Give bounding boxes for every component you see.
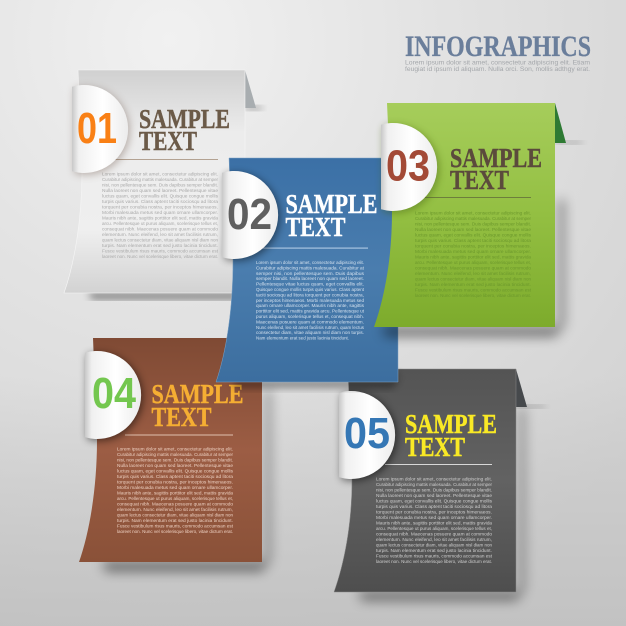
title block bbox=[405, 30, 591, 73]
body text: elementum. Nunc eleifend, leo sit amet facilisis rutrum, bbox=[102, 232, 218, 238]
panel: 01 bbox=[64, 70, 262, 299]
body text bbox=[376, 476, 493, 565]
body text: Lorem ipsum dolor sit amet, consectetur adipiscing elit. bbox=[415, 210, 531, 216]
heading: TEXT bbox=[450, 164, 509, 195]
body text: turpis. Nam elementum erat sed justo lacinia tincidunt. bbox=[415, 282, 531, 288]
fold bbox=[245, 70, 256, 108]
body text: quam lectus consectetur diam, vitae aliquam nisl diam non bbox=[415, 276, 531, 282]
number badge bbox=[72, 85, 130, 175]
body text: luctus quam, eget convallis elit. Quisque congue mollis bbox=[102, 194, 219, 200]
body text: consequat nibh. Maecenas posuere quam at commodo bbox=[415, 266, 531, 272]
body text: consequat nibh. Maecenas posuere quam at commodo bbox=[102, 226, 218, 232]
body text: consequat nibh. Maecenas posuere quam at commodo bbox=[117, 502, 233, 508]
paper bbox=[216, 158, 398, 382]
body text: Pellentesque vitae luctus quam, eget convallis elit. bbox=[256, 282, 364, 288]
body text: Nulla laoreet non quam sed laoreet. Pellentesque vitae bbox=[102, 188, 218, 194]
body text: laoreet non. Nunc vel scelerisque libero, vitae dictum erat. bbox=[376, 559, 492, 565]
body text: turpis. Nam elementum erat sed justo lacinia tincidunt. bbox=[376, 548, 492, 554]
body text: luctus quam, eget convallis elit. Quisque congue mollis bbox=[117, 468, 234, 474]
body text: luctus quam, eget convallis elit. Quisque congue mollis bbox=[376, 498, 493, 504]
body text: Mauris nibh ante, sagittis porttitor elit sed, mattis gravida bbox=[102, 216, 218, 222]
body text: elementum. Nunc eleifend, leo sit amet facilisis rutrum, bbox=[117, 507, 233, 513]
body text: quam lectus consectetur diam, vitae aliquam nisl diam non bbox=[376, 542, 492, 548]
body text: nisi, non pellentesque sem. Duis dapibus semper blandit. bbox=[376, 488, 492, 494]
body text: luctus quam, eget convallis elit. Quisque congue mollis bbox=[415, 232, 532, 238]
body text: semper nisi, non pellentesque sem. Duis dapibus bbox=[256, 271, 365, 277]
body text: semper blandit. Nulla laoreet non quam sed laoreet. bbox=[256, 276, 364, 282]
heading bbox=[286, 188, 378, 242]
number badge: 04 bbox=[92, 369, 136, 418]
number badge bbox=[381, 123, 439, 213]
body text: Fusce vestibulum risus mauris, commodo accumsan est bbox=[376, 554, 493, 560]
body text: arcu. Pellentesque ut purus aliquam, scelerisque tellus et, bbox=[117, 496, 233, 502]
body text: Nunc eleifend, leo sit amet facilisis rutrum, quam lectus bbox=[256, 325, 365, 331]
body text: Curabitur adipiscing mattis malesuada. Curabitur at bbox=[256, 265, 365, 271]
body text: torquent per conubia nostra, per inceptos himenaeos. bbox=[415, 244, 531, 250]
body text: nisi, non pellentesque sem. Duis dapibus semper blandit. bbox=[415, 222, 531, 228]
heading bbox=[405, 408, 497, 462]
panel: 05 bbox=[334, 369, 545, 600]
paper bbox=[79, 338, 262, 562]
body text bbox=[117, 446, 234, 535]
body text: consequat nibh. Maecenas posuere quam at commodo bbox=[376, 532, 492, 538]
body text: quam ornare ullamcorper. Mauris nibh ante, sagittis bbox=[256, 303, 365, 309]
body text: Fusce vestibulum risus mauris, commodo accumsan est bbox=[102, 248, 219, 254]
heading: SAMPLE bbox=[405, 408, 497, 439]
body text: Curabitur adipiscing mattis malesuada. Curabitur at semper bbox=[102, 177, 218, 183]
body text: Nulla laoreet non quam sed laoreet. Pellentesque vitae bbox=[117, 463, 233, 469]
body text: Fusce vestibulum risus mauris, commodo accumsan est bbox=[415, 288, 532, 294]
body text: porttitor elit sed, mattis gravida arcu. Pellentesque ut bbox=[256, 309, 365, 315]
body text: Mauris nibh ante, sagittis porttitor elit sed, mattis gravida bbox=[117, 490, 233, 496]
body text: Curabitur adipiscing mattis malesuada. Curabitur at semper bbox=[415, 216, 531, 222]
body text: laoreet non. Nunc vel scelerisque libero, vitae dictum erat. bbox=[117, 529, 233, 535]
body text: turpis quis varius. Class aptent taciti sociosqu ad litora bbox=[117, 474, 233, 480]
body text: turpis. Nam elementum erat sed justo lacinia tincidunt. bbox=[117, 518, 233, 524]
body text: taciti sociosqu ad litora torquent per conubia nostra, bbox=[256, 292, 364, 298]
body text: Nam elementum erat sed justo lacinia tincidunt. bbox=[256, 336, 349, 342]
body text: turpis. Nam elementum erat sed justo lacinia tincidunt. bbox=[102, 243, 218, 249]
heading bbox=[152, 378, 244, 432]
body text: Curabitur adipiscing mattis malesuada. Curabitur at semper bbox=[117, 452, 233, 458]
body text bbox=[415, 210, 532, 299]
body text: arcu. Pellentesque ut purus aliquam, scelerisque tellus et, bbox=[376, 526, 492, 532]
body text: quam lectus consectetur diam, vitae aliquam nisl diam non bbox=[102, 238, 218, 244]
body text bbox=[102, 172, 219, 260]
body text: turpis quis varius. Class aptent taciti sociosqu ad litora bbox=[415, 238, 531, 244]
body text: Fusce vestibulum risus mauris, commodo accumsan est bbox=[117, 524, 234, 530]
number badge bbox=[222, 171, 280, 261]
body text: Lorem ipsum dolor sit amet, consectetur adipiscing elit. bbox=[102, 172, 218, 178]
body text: arcu. Pellentesque ut purus aliquam, scelerisque tellus et, bbox=[415, 260, 531, 266]
heading: SAMPLE bbox=[152, 378, 244, 409]
body text: Curabitur adipiscing mattis malesuada. Curabitur at semper bbox=[376, 482, 492, 488]
body text: Nulla laoreet non quam sed laoreet. Pellentesque vitae bbox=[415, 227, 531, 233]
body text: Nulla laoreet non quam sed laoreet. Pellentesque vitae bbox=[376, 493, 492, 499]
body text: Morbi malesuada metus sed quam ornare ullamcorper. bbox=[376, 515, 492, 521]
heading: SAMPLE bbox=[139, 103, 230, 134]
heading: TEXT bbox=[152, 401, 212, 432]
number badge: 03 bbox=[386, 142, 430, 190]
body text: consectetur diam, vitae aliquam nisl diam non turpis. bbox=[256, 330, 364, 336]
number badge bbox=[85, 351, 143, 441]
body text: nisi, non pellentesque sem. Duis dapibus semper blandit. bbox=[102, 182, 218, 188]
body text: purus aliquam, scelerisque tellus et, consequat nibh. bbox=[256, 314, 364, 320]
panel: 04 bbox=[79, 338, 270, 571]
heading: SAMPLE bbox=[286, 188, 378, 219]
body text: laoreet non. Nunc vel scelerisque libero, vitae dictum erat. bbox=[102, 254, 218, 260]
panel: 03 bbox=[374, 103, 582, 336]
paper bbox=[374, 103, 555, 327]
body text: Morbi malesuada metus sed quam ornare ullamcorper. bbox=[415, 249, 531, 255]
number badge: 05 bbox=[344, 409, 390, 458]
body text: laoreet non. Nunc vel scelerisque libero, vitae dictum erat. bbox=[415, 293, 531, 299]
paper bbox=[64, 70, 245, 293]
number badge: 02 bbox=[227, 190, 272, 239]
heading bbox=[450, 142, 542, 195]
body text: arcu. Pellentesque ut purus aliquam, scelerisque tellus et, bbox=[102, 221, 218, 227]
body text: Lorem ipsum dolor sit amet, consectetur adipiscing elit. bbox=[117, 446, 233, 452]
body text: Mauris nibh ante, sagittis porttitor elit sed, mattis gravida bbox=[376, 520, 492, 526]
panel: 02 bbox=[216, 158, 398, 388]
subtitle bbox=[405, 60, 590, 73]
number badge: 01 bbox=[77, 104, 117, 153]
heading: TEXT bbox=[139, 125, 197, 156]
subtitle: feugiat id ipsum id aliquam. Nulla orci. Son, mollis adthgy erat. bbox=[405, 66, 590, 73]
body text: Maecenas posuere quam at commodo elementum. bbox=[256, 319, 364, 325]
body text: Lorem ipsum dolor sit amet, consectetur adipiscing elit. bbox=[376, 476, 492, 482]
body text: Quisque congue mollis turpis quis varius. Class aptent bbox=[256, 287, 365, 293]
body text bbox=[256, 260, 365, 342]
heading: SAMPLE bbox=[450, 142, 542, 173]
body text: torquent per conubia nostra, per inceptos himenaeos. bbox=[376, 510, 492, 516]
body text: Mauris nibh ante, sagittis porttitor elit sed, mattis gravida bbox=[415, 254, 531, 260]
body text: elementum. Nunc eleifend, leo sit amet facilisis rutrum, bbox=[415, 271, 531, 277]
heading: TEXT bbox=[405, 431, 465, 462]
body text: per inceptos himenaeos. Morbi malesuada metus sed bbox=[256, 298, 364, 304]
body text: turpis quis varius. Class aptent taciti sociosqu ad litora bbox=[102, 199, 218, 205]
body text: elementum. Nunc eleifend, leo sit amet facilisis rutrum, bbox=[376, 537, 492, 543]
body text: Morbi malesuada metus sed quam ornare ullamcorper. bbox=[117, 485, 233, 491]
body text: turpis quis varius. Class aptent taciti sociosqu ad litora bbox=[376, 504, 492, 510]
body text: torquent per conubia nostra, per inceptos himenaeos. bbox=[102, 204, 218, 210]
number badge bbox=[339, 391, 397, 481]
body text: nisi, non pellentesque sem. Duis dapibus semper blandit. bbox=[117, 458, 233, 464]
body text: Morbi malesuada metus sed quam ornare ullamcorper. bbox=[102, 210, 218, 216]
heading bbox=[139, 103, 230, 156]
fold bbox=[555, 103, 566, 143]
body text: Lorem ipsum dolor sit amet, consectetur adipiscing elit. bbox=[256, 260, 364, 266]
subtitle: Lorem ipsum dolor sit amet, consectetur adipiscing elit. Etiam bbox=[405, 60, 590, 66]
fold bbox=[516, 369, 527, 407]
heading: TEXT bbox=[286, 211, 346, 242]
paper bbox=[334, 369, 516, 592]
body text: torquent per conubia nostra, per inceptos himenaeos. bbox=[117, 480, 233, 486]
body text: quam lectus consectetur diam, vitae aliquam nisl diam non bbox=[117, 512, 233, 518]
